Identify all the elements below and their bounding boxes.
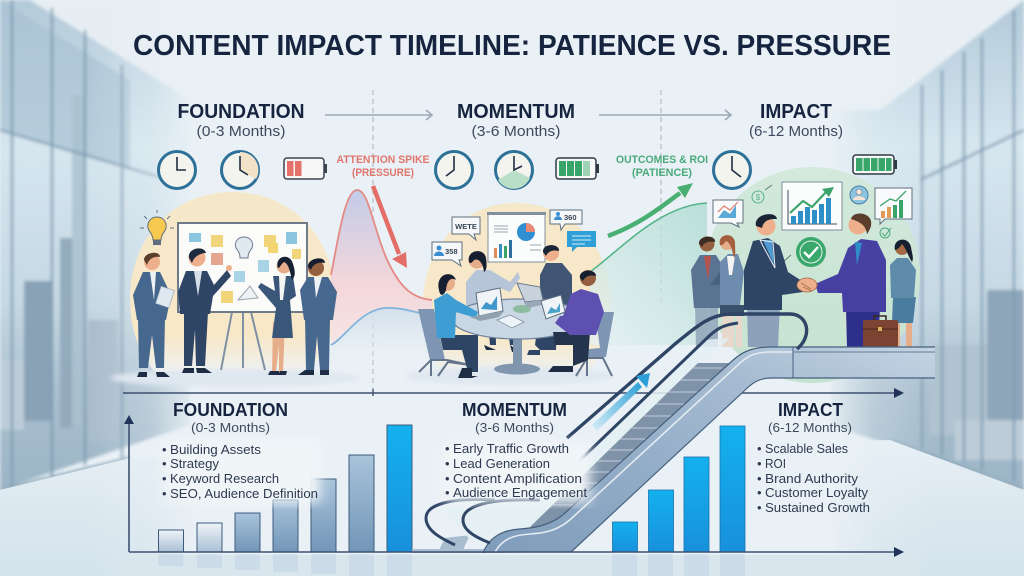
bullet list: impact: •: [757, 456, 762, 471]
bullet list: momentum: •: [445, 471, 450, 486]
person: woman gesturing: [258, 257, 296, 375]
icon: full battery: [853, 155, 897, 174]
lower panel: foundation: FOUNDATION: [173, 400, 288, 420]
laptop: left: [470, 288, 504, 321]
icon: mostly charged battery: [556, 158, 599, 179]
speech bubble: 358: [432, 242, 462, 266]
bullet list: momentum: •: [445, 441, 450, 456]
laptop: center: [517, 283, 550, 308]
clock: momentum 1: [436, 152, 472, 188]
backdrop: impact green circle: [704, 167, 920, 383]
clock: foundation 2: [222, 152, 258, 188]
label: outcomes and roi: OUTCOMES & ROI: [616, 154, 708, 166]
arrow: pressure down: [373, 186, 407, 268]
bottom axes: [124, 415, 904, 557]
header: foundation: (0-3 Months): [196, 123, 286, 140]
icon: light bulb: [140, 210, 174, 245]
label: attention spike: ATTENTION SPIKE: [336, 154, 430, 166]
icon: dollar coin: $: [756, 193, 761, 202]
bullet list: foundation: Strategy: [170, 456, 219, 471]
scene: impact handshake: [691, 182, 916, 347]
whiteboard: [178, 223, 307, 370]
icon: small check: [880, 228, 891, 238]
round table: [452, 299, 584, 374]
bullet list: impact: •: [757, 485, 762, 500]
header: momentum: MOMENTUM: [457, 101, 575, 123]
handrail: second: [578, 323, 738, 462]
header: impact: (6-12 Months): [749, 123, 843, 140]
lower panel: momentum: [445, 400, 587, 500]
arrow: escalator direction: [592, 373, 650, 431]
bullet list: impact: Brand Authority: [765, 471, 859, 486]
bullet list: momentum: •: [445, 456, 450, 471]
bullet list: foundation: •: [162, 456, 167, 471]
arrow: momentum to impact: [599, 110, 731, 120]
chart card: small right: [875, 188, 912, 224]
handrail: upper: [567, 314, 807, 438]
bullet list: foundation: SEO, Audience Definition: [170, 486, 318, 501]
bullet list: foundation: Building Assets: [170, 442, 262, 457]
header: impact: IMPACT: [760, 101, 832, 123]
arrow: patience up: [608, 183, 693, 236]
person: main man purple: [815, 214, 886, 347]
icon: low battery: [284, 158, 327, 179]
laptop: right: [541, 295, 565, 319]
bullet list: momentum: Early Traffic Growth: [453, 441, 569, 456]
escalator glass: [445, 338, 730, 540]
axis: upper timeline: [123, 388, 904, 398]
bullet list: impact: Scalable Sales: [765, 441, 848, 456]
escalator steps: [530, 363, 735, 527]
floor: [0, 440, 1024, 576]
person: woman in gray: [466, 251, 520, 352]
faint floor reflections: [158, 554, 745, 576]
bullet list: impact: •: [757, 441, 762, 456]
bullet list: impact: ROI: [765, 456, 786, 471]
clock: momentum 2: [496, 152, 532, 189]
bullet list: impact: •: [757, 471, 762, 486]
bullet list: momentum: [445, 441, 587, 500]
lower panel: momentum: MOMENTUM: [462, 400, 567, 420]
text halos: [165, 440, 590, 502]
presentation board: [487, 212, 546, 262]
lower panel: momentum: (3-6 Months): [475, 420, 554, 435]
header: momentum: (3-6 Months): [472, 123, 561, 140]
briefcase: [863, 316, 898, 347]
floor shadow: [110, 369, 360, 387]
header: foundation: FOUNDATION: [178, 101, 304, 123]
speech bubble: 358: 358: [445, 247, 458, 256]
label: outcomes and roi: [616, 154, 708, 179]
header: impact: [749, 101, 843, 140]
backdrop: foundation beige circle: [130, 192, 335, 372]
bullet list: foundation: Keyword Research: [170, 471, 279, 486]
speech bubble: 360: [550, 210, 582, 230]
header: momentum: [457, 101, 575, 140]
bullet list: foundation: •: [162, 471, 167, 486]
chart card: main growth: [782, 182, 842, 230]
icon: person badge: [850, 186, 868, 204]
lower panel: impact: IMPACT: [778, 400, 843, 420]
label: attention spike: (PRESSURE): [352, 167, 414, 179]
speech bubble: wete: [452, 217, 480, 240]
bullet list: impact: Customer Loyalty: [765, 485, 869, 500]
speech bubble: 360: 360: [564, 213, 577, 222]
bullet list: impact: •: [757, 500, 762, 515]
chart: attention spike curve: [331, 190, 432, 372]
person: man presenting: [178, 248, 232, 373]
icon: dollar coin: [752, 185, 772, 203]
person: man in navy: [527, 245, 572, 355]
escalator: [412, 314, 935, 553]
bullet list: momentum: •: [445, 485, 450, 500]
chart: patience growth curve: [590, 203, 707, 345]
scene: foundation team: [133, 210, 337, 377]
clock: foundation 1: [158, 152, 196, 188]
person: man hands in pockets: [298, 258, 337, 375]
label: attention spike: [336, 154, 430, 179]
person: clapping woman: [720, 235, 744, 347]
person: main man navy: [744, 214, 805, 347]
bar chart: foundation growth: [158, 425, 412, 552]
speech bubble: wete: WETE: [455, 222, 477, 231]
person: woman in blue: [418, 274, 478, 378]
header: foundation: [178, 101, 304, 140]
icon: large check: [783, 237, 826, 267]
left window wall: [0, 0, 190, 490]
bullet list: momentum: Lead Generation: [453, 456, 550, 471]
dashed phase dividers: [373, 90, 661, 393]
lower panel: impact: (6-12 Months): [768, 420, 852, 435]
lower panel: impact: [757, 400, 870, 515]
lower panel: foundation: (0-3 Months): [191, 420, 270, 435]
person: man in purple: [548, 270, 614, 376]
bullet list: foundation: •: [162, 486, 167, 501]
escalator lower base: [412, 535, 487, 553]
backdrop: momentum beige circle: [423, 203, 610, 372]
label: outcomes and roi: (PATIENCE): [632, 167, 692, 179]
title: CONTENT IMPACT TIMELINE: PATIENCE VS. PRESSURE: [133, 30, 891, 62]
person: clapping woman right: [890, 240, 916, 347]
bullet list: momentum: Audience Engagement: [453, 485, 587, 500]
person: clapping man: [691, 236, 725, 347]
escalator body band: [483, 347, 935, 553]
bullet list: impact: Sustained Growth: [765, 500, 870, 515]
bullet list: foundation: •: [162, 442, 167, 457]
lower panel: foundation: [162, 400, 318, 501]
bullet list: impact: [757, 441, 870, 515]
arrow: foundation to momentum: [325, 110, 432, 120]
handrail: lower loops: [426, 499, 540, 545]
scene: momentum team: [418, 210, 614, 378]
bar chart: impact growth: [612, 426, 745, 552]
bullet list: momentum: Content Amplification: [453, 471, 582, 486]
handshake: [797, 278, 817, 292]
person: man with clipboard: [133, 253, 174, 377]
clock: impact: [714, 152, 750, 188]
speech bubble: message: [567, 231, 596, 252]
chart card: small left: [713, 200, 743, 227]
bullet list: foundation: [162, 442, 318, 501]
right window wall: [830, 0, 1024, 490]
